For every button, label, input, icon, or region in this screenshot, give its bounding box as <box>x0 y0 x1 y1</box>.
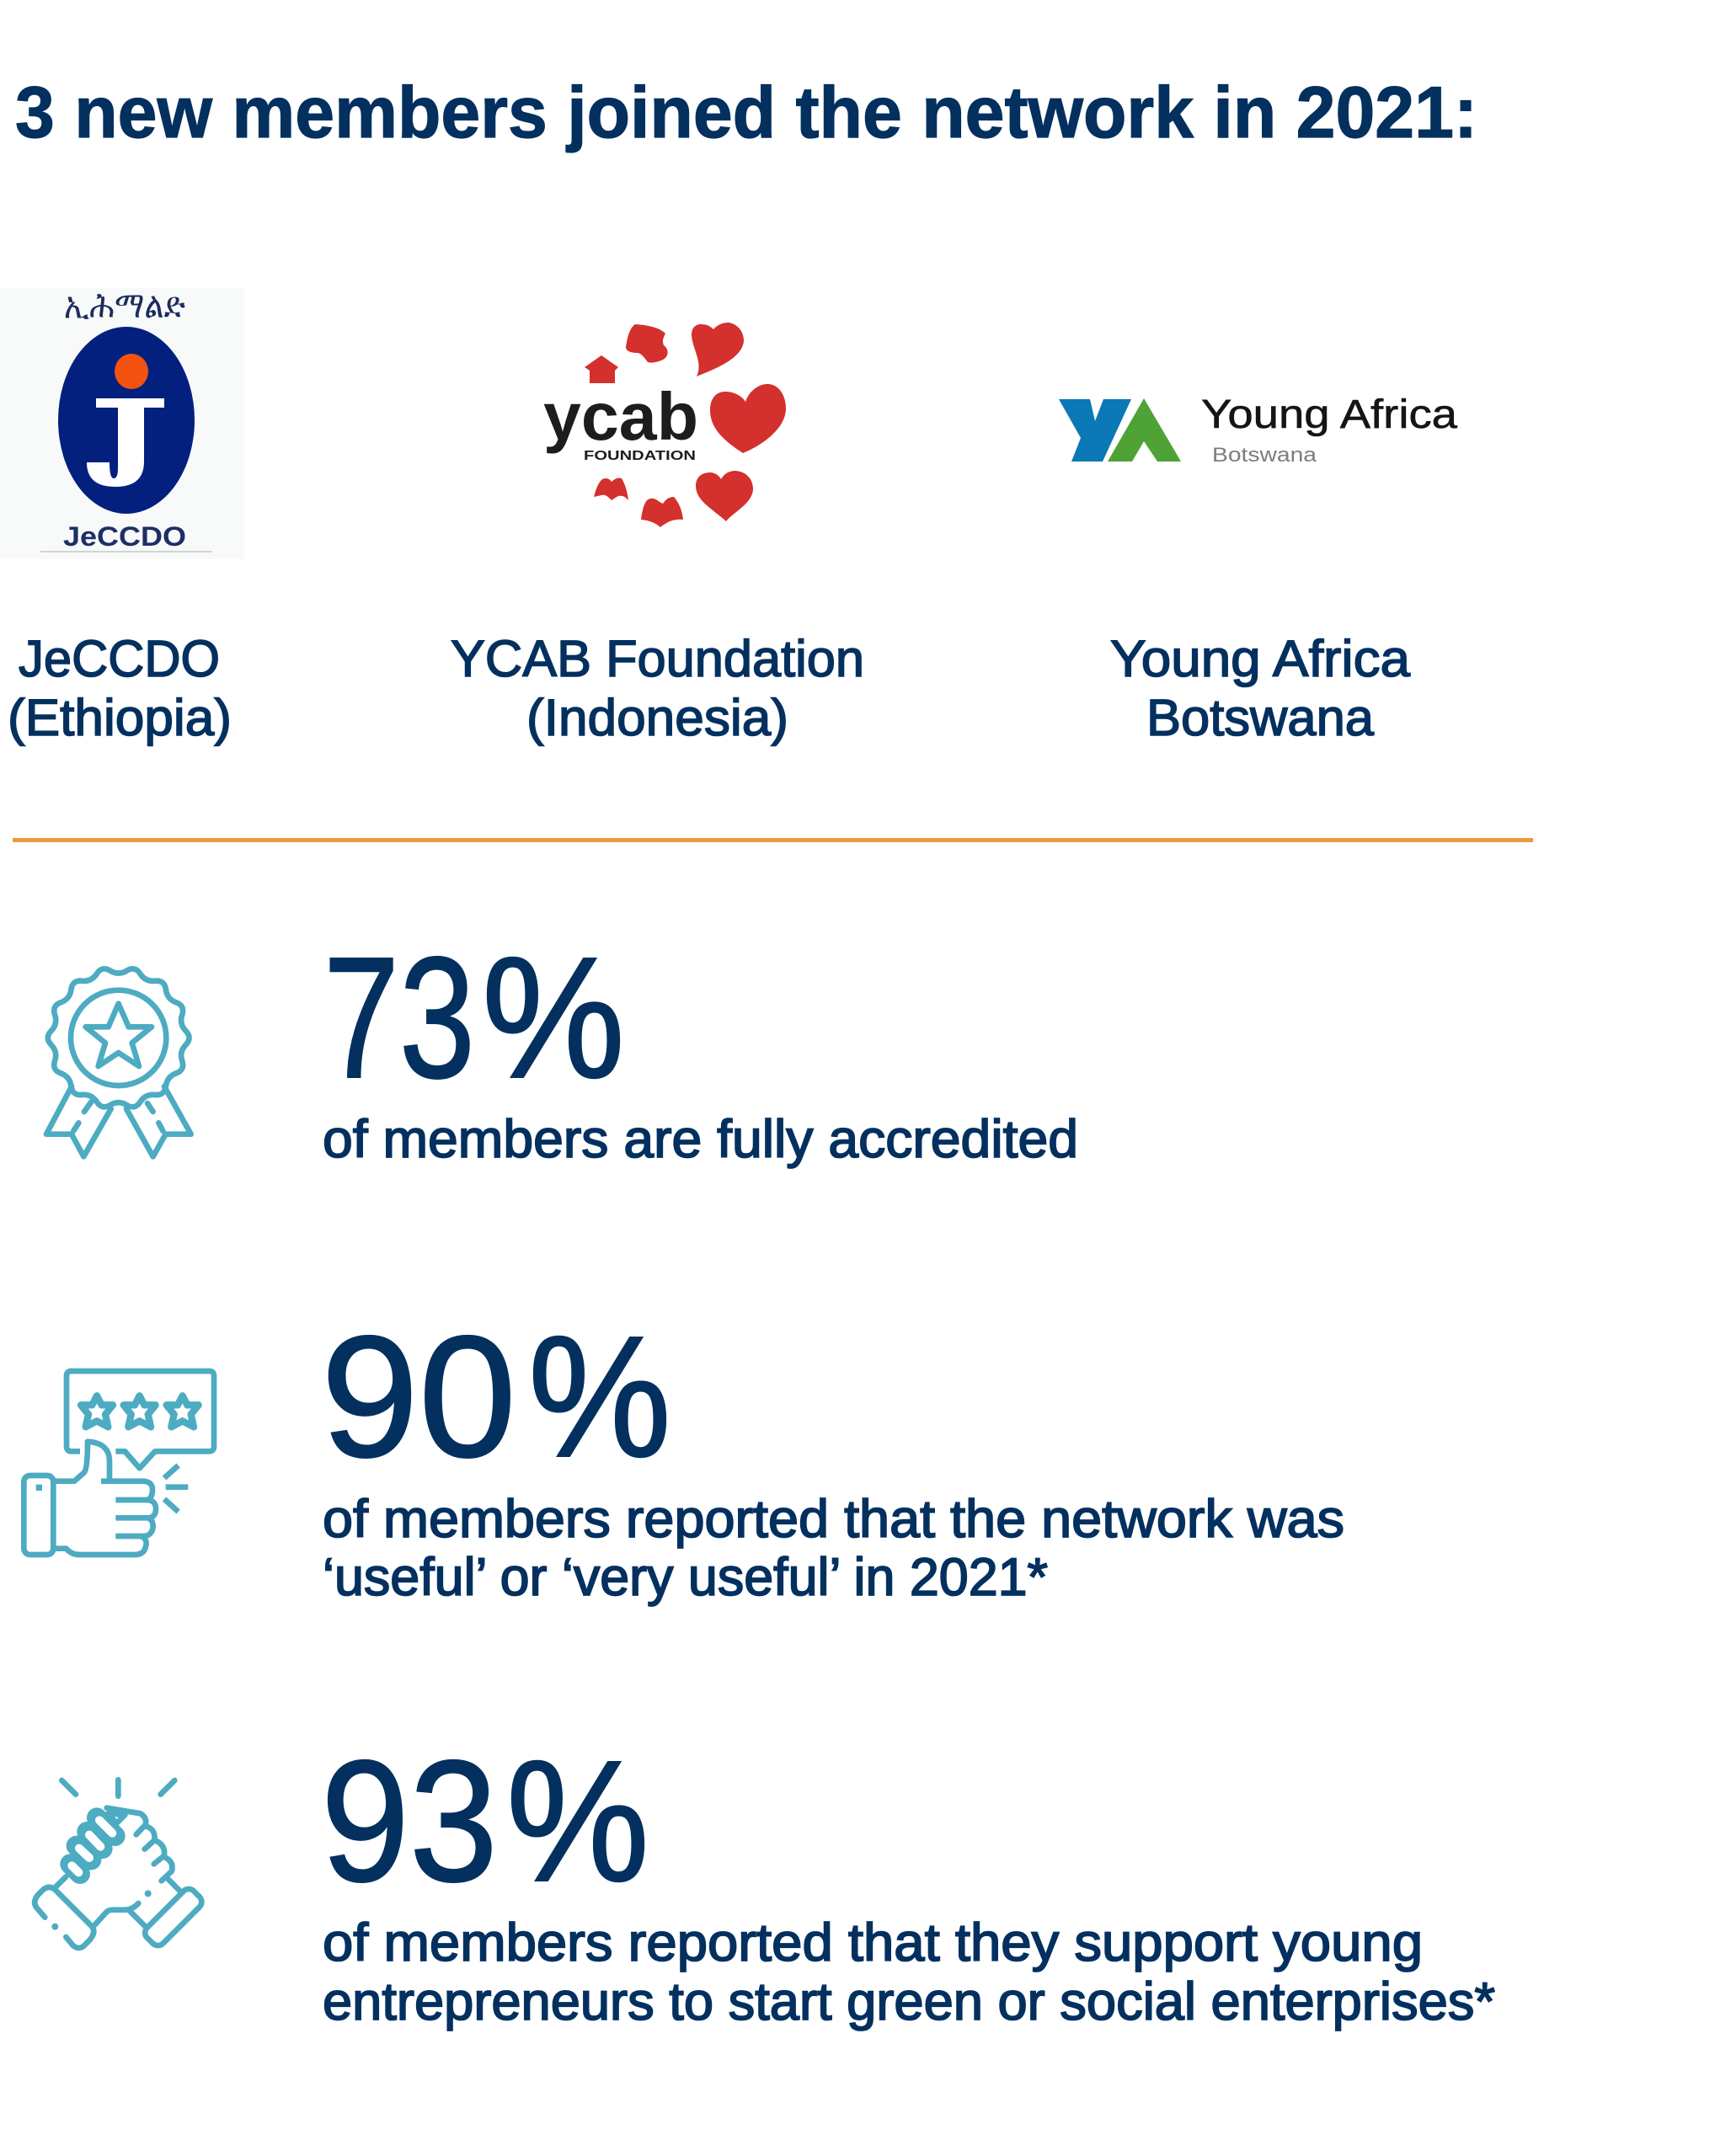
text: accreditation: of members are fully accredited <box>323 1110 1078 1169</box>
stat: 93%: % <box>506 1725 649 1918</box>
stat: 73% <box>323 921 625 1114</box>
logo: Young Africa Botswana: Botswana <box>1212 444 1317 467</box>
label: Young Africa Botswana: Botswana <box>1146 689 1374 746</box>
label: Young Africa Botswana <box>1110 630 1410 746</box>
stat: 93% <box>321 1725 649 1918</box>
stat: 93%: 93 <box>321 1725 498 1918</box>
icon: rosette award <box>46 969 191 1156</box>
text: green and social enterprises <box>323 1913 1495 2031</box>
label: JeCCDO (Ethiopia) <box>8 630 232 746</box>
label: JeCCDO (Ethiopia): (Ethiopia) <box>8 689 232 746</box>
stat: 90% <box>321 1300 671 1493</box>
label: YCAB Foundation (Indonesia): YCAB Foundation <box>451 630 864 687</box>
text: network usefulness <box>323 1490 1344 1607</box>
logo: Young Africa Botswana: Young Africa <box>1201 392 1457 437</box>
divider: orange rule <box>13 838 1533 842</box>
logo: YCAB Foundation: ycab <box>543 379 698 454</box>
logo: Young Africa Botswana <box>1059 392 1457 467</box>
text: green and social enterprises: entrepreneurs to start green or social enterprises* <box>323 1972 1495 2031</box>
logo: JeCCDO <box>0 285 243 559</box>
title: 3 new members joined the network in 2021: <box>15 72 1477 153</box>
logo: YCAB Foundation: FOUNDATION <box>584 449 696 463</box>
text: network usefulness: of members reported that the network was <box>323 1490 1344 1549</box>
stat: 73%: 73 <box>323 921 475 1114</box>
stat: 90%: 90 <box>321 1300 516 1493</box>
label: YCAB Foundation (Indonesia) <box>451 630 864 746</box>
text: network usefulness: ‘useful’ or ‘very useful’ in 2021* <box>323 1548 1048 1607</box>
label: JeCCDO (Ethiopia): JeCCDO <box>19 630 220 687</box>
stat: 90%: % <box>528 1300 671 1493</box>
stat: 73%: % <box>482 921 625 1114</box>
logo: JeCCDO: JeCCDO <box>63 521 186 552</box>
logo: YCAB Foundation <box>543 323 786 527</box>
icon: clasped hands <box>35 1780 205 1949</box>
text: green and social enterprises: of members reported that they support young <box>323 1913 1423 1972</box>
label: Young Africa Botswana: Young Africa <box>1110 630 1410 687</box>
label: YCAB Foundation (Indonesia): (Indonesia) <box>526 689 788 746</box>
logo: JeCCDO: ኢሕማልድ <box>64 285 185 327</box>
icon: thumbs up with rating <box>24 1371 214 1555</box>
